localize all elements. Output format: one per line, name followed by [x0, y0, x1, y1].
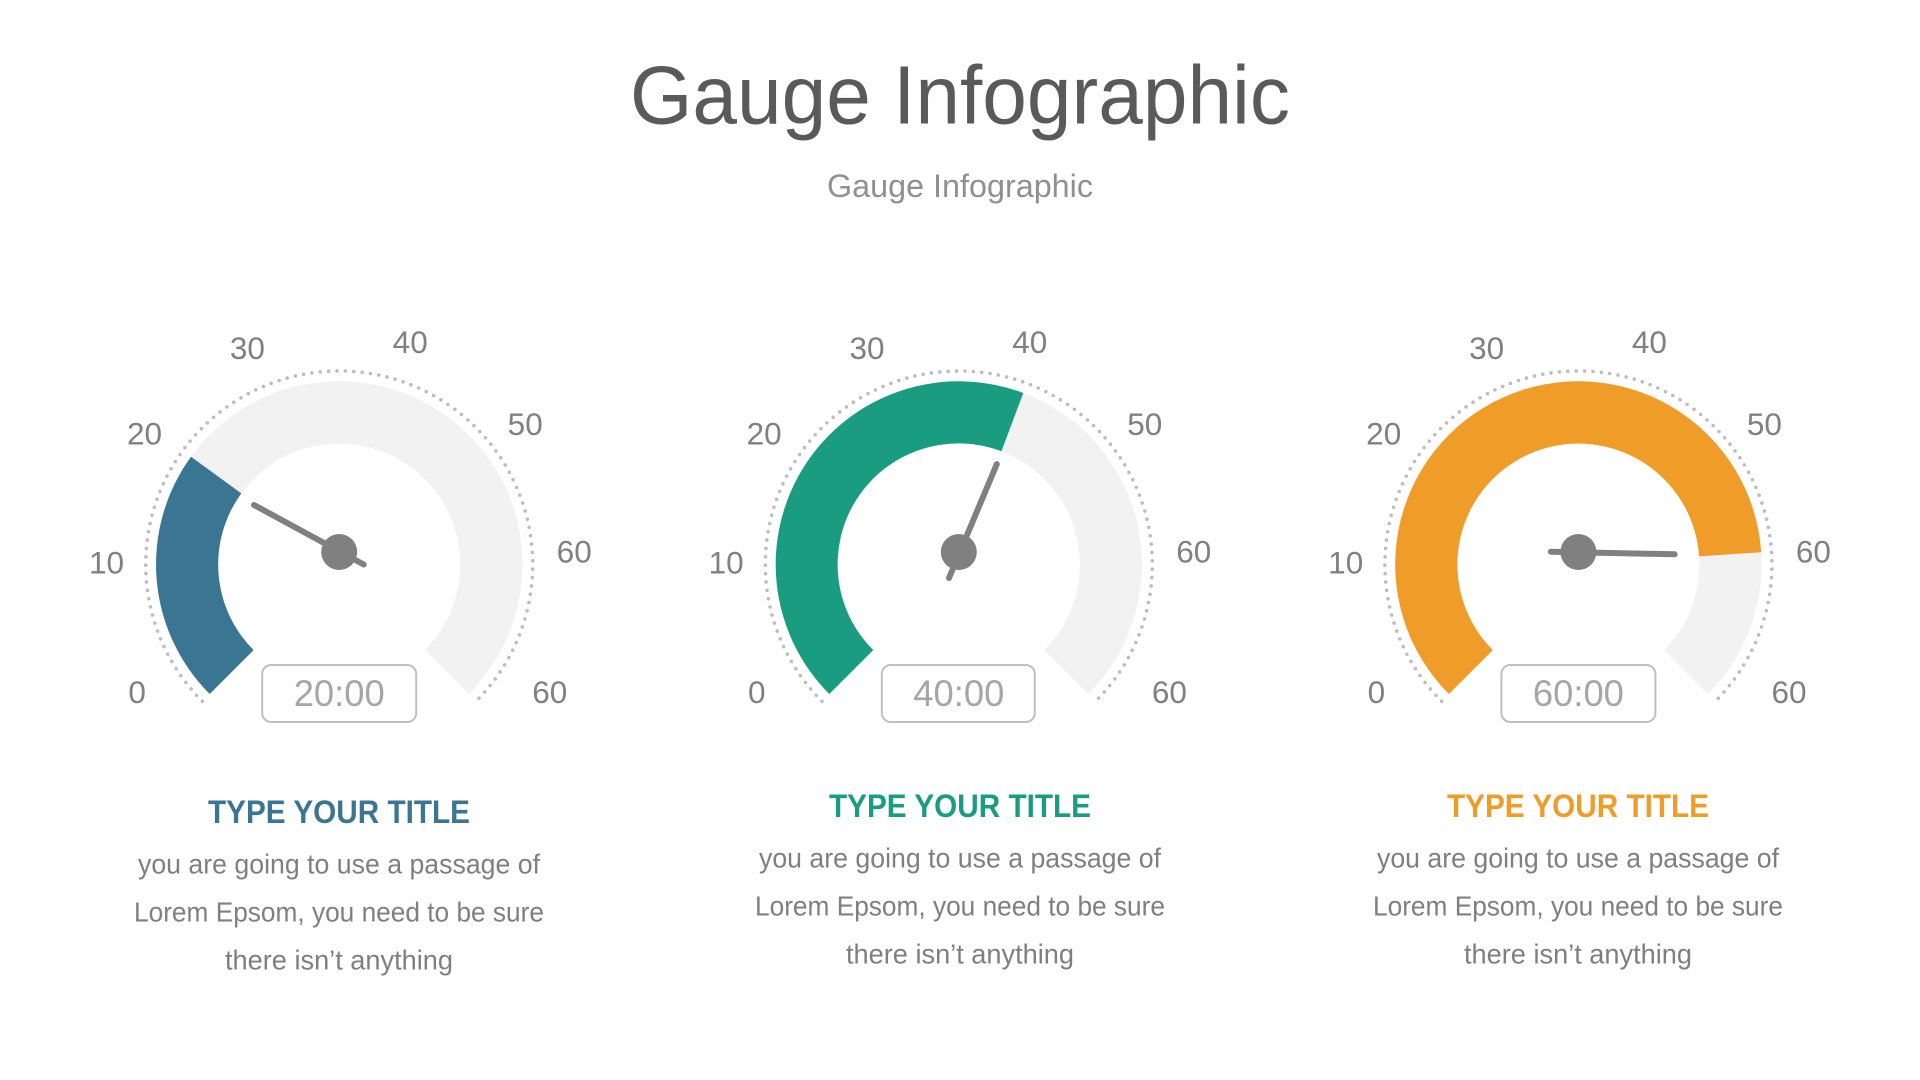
scale labels: 10 [89, 544, 124, 580]
description 2 [755, 842, 1165, 969]
panel: gauge 1 blue [89, 324, 592, 975]
needle [1551, 552, 1675, 554]
dotted outer ring [1385, 371, 1772, 701]
scale labels: 20 [127, 416, 162, 452]
scale labels: 30 [230, 330, 265, 366]
description 2: you are going to use a passage of [759, 842, 1161, 873]
scale labels: 0 [748, 674, 766, 710]
time readout: 40:00 [913, 673, 1004, 714]
scale labels: 60 [1176, 533, 1211, 569]
scale labels [89, 324, 592, 710]
gauge dial 1 [89, 324, 592, 722]
description 2: there isn’t anything [846, 938, 1074, 969]
heading 2: TYPE YOUR TITLE [829, 788, 1091, 824]
description 1 [134, 848, 544, 975]
time readout [262, 665, 416, 722]
scale labels: 10 [1328, 544, 1363, 580]
scale labels: 60 [1796, 533, 1831, 569]
time readout: 60:00 [1533, 673, 1624, 714]
value arc 60 [1395, 381, 1761, 694]
value arc 20 [156, 457, 254, 694]
subtitle: Gauge Infographic [827, 168, 1093, 204]
dotted outer ring [765, 371, 1152, 701]
scale labels: 20 [747, 416, 782, 452]
needle hub [321, 534, 357, 570]
description 1: there isn’t anything [225, 944, 453, 975]
scale labels: 60 [532, 674, 567, 710]
scale labels: 50 [508, 406, 543, 442]
panel: gauge 3 orange [1328, 324, 1831, 969]
scale labels: 60 [1771, 674, 1807, 710]
scale labels [709, 324, 1211, 710]
scale labels: 20 [1366, 416, 1401, 452]
description 3: Lorem Epsom, you need to be sure [1373, 890, 1783, 921]
description 1: Lorem Epsom, you need to be sure [134, 896, 544, 927]
scale labels: 30 [849, 330, 885, 366]
description 1: you are going to use a passage of [138, 848, 540, 879]
scale labels: 60 [557, 533, 592, 569]
needle hub [941, 534, 977, 570]
heading 1: TYPE YOUR TITLE [208, 794, 470, 830]
gauge track [776, 381, 1142, 694]
needle [254, 505, 364, 564]
scale labels [1328, 324, 1831, 710]
description 3: there isn’t anything [1464, 938, 1692, 969]
time readout: 20:00 [294, 673, 385, 714]
needle [949, 464, 997, 578]
scale labels: 10 [709, 544, 744, 580]
needle hub [1560, 534, 1596, 570]
scale labels: 40 [1012, 324, 1047, 360]
value arc 40 [776, 381, 1023, 694]
scale labels: 40 [393, 324, 428, 360]
scale labels: 50 [1127, 406, 1162, 442]
scale labels: 0 [128, 674, 146, 710]
gauge dial 3 [1328, 324, 1831, 722]
description 2: Lorem Epsom, you need to be sure [755, 890, 1165, 921]
scale labels: 30 [1469, 330, 1504, 366]
gauge dial 2 [709, 324, 1211, 722]
description 3 [1373, 842, 1783, 969]
gauge track [156, 381, 522, 694]
time readout [1501, 665, 1655, 722]
scale labels: 50 [1747, 406, 1782, 442]
panel: gauge 2 teal [709, 324, 1211, 969]
gauge track [1395, 381, 1762, 694]
scale labels: 40 [1632, 324, 1667, 360]
time readout [882, 665, 1035, 722]
dotted outer ring [146, 371, 533, 701]
title: Gauge Infographic [630, 48, 1290, 142]
heading 3: TYPE YOUR TITLE [1447, 788, 1709, 824]
description 3: you are going to use a passage of [1377, 842, 1779, 873]
scale labels: 60 [1152, 674, 1187, 710]
scale labels: 0 [1368, 674, 1385, 710]
